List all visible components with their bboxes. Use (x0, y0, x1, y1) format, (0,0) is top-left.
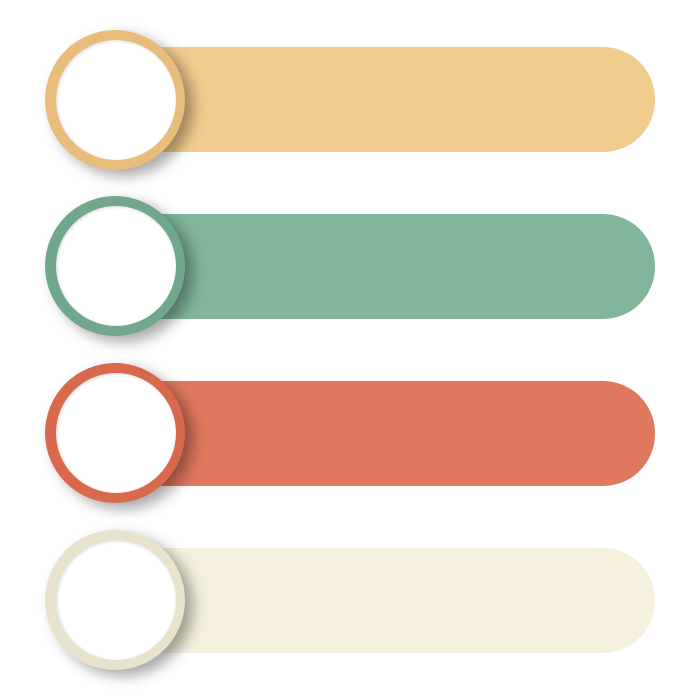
circle 2: green ring (45, 196, 185, 336)
circle 3: orange ring (45, 363, 185, 503)
circle 4: cream ring (45, 530, 185, 670)
bar 1: yellow (150, 47, 655, 152)
circle 1: yellow ring (45, 30, 185, 170)
bar 3: orange (150, 381, 655, 486)
bar 2: green (150, 214, 655, 319)
bar 4: cream (150, 548, 655, 653)
